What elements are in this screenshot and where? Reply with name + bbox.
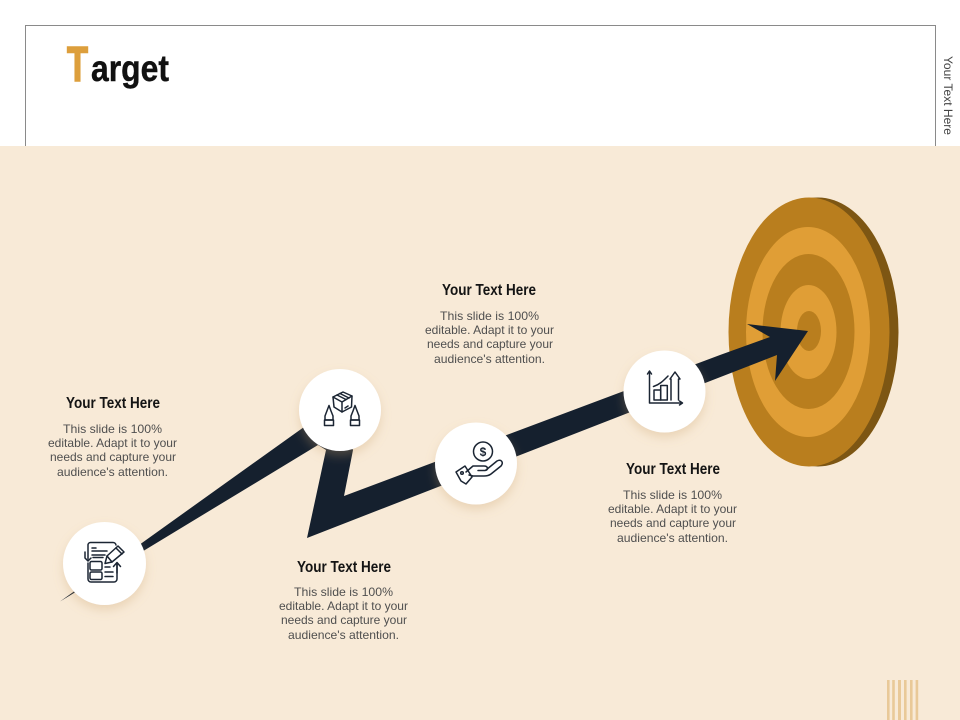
zigzag arrow <box>60 324 808 602</box>
text block 2: This slide is 100% <box>440 309 539 323</box>
decorative stripes <box>887 680 918 720</box>
text block 3 <box>279 559 408 642</box>
text block 4 <box>608 461 737 545</box>
node 4: growth chart icon <box>624 350 706 432</box>
icon: bar chart <box>648 371 682 405</box>
text block 3: editable. Adapt it to your <box>279 599 408 613</box>
text block 1: needs and capture your <box>50 450 176 464</box>
text block 1: This slide is 100% <box>63 422 162 436</box>
text block 3: This slide is 100% <box>294 585 393 599</box>
node 3: money in hand icon <box>435 422 517 504</box>
text block 1 <box>48 395 177 479</box>
text block 3: audience's attention. <box>288 628 399 642</box>
background panel <box>0 146 960 720</box>
text block 2 <box>425 282 554 366</box>
text block 3: Your Text Here <box>297 559 391 576</box>
text block 3: needs and capture your <box>281 613 407 627</box>
text block 2: Your Text Here <box>442 282 536 299</box>
node 2: box in hands icon <box>299 369 381 451</box>
title: T <box>67 38 88 92</box>
text block 4: needs and capture your <box>610 516 736 530</box>
side label: Your Text Here <box>941 56 955 135</box>
node 1: document icon <box>63 522 146 605</box>
text block 4: audience's attention. <box>617 531 728 545</box>
text block 1: audience's attention. <box>57 465 168 479</box>
title <box>67 38 169 92</box>
text block 2: audience's attention. <box>434 352 545 366</box>
text block 4: editable. Adapt it to your <box>608 502 737 516</box>
icon: document <box>85 542 124 582</box>
header frame <box>26 26 936 146</box>
text block 4: This slide is 100% <box>623 488 722 502</box>
text block 4: Your Text Here <box>626 461 720 478</box>
icon: coin and hand: $ <box>480 445 487 459</box>
text block 2: needs and capture your <box>427 337 553 351</box>
title: arget <box>91 48 169 89</box>
text block 1: Your Text Here <box>66 395 160 412</box>
text block 1: editable. Adapt it to your <box>48 436 177 450</box>
target <box>728 198 898 466</box>
icon: box and hands <box>324 392 360 426</box>
text block 2: editable. Adapt it to your <box>425 323 554 337</box>
